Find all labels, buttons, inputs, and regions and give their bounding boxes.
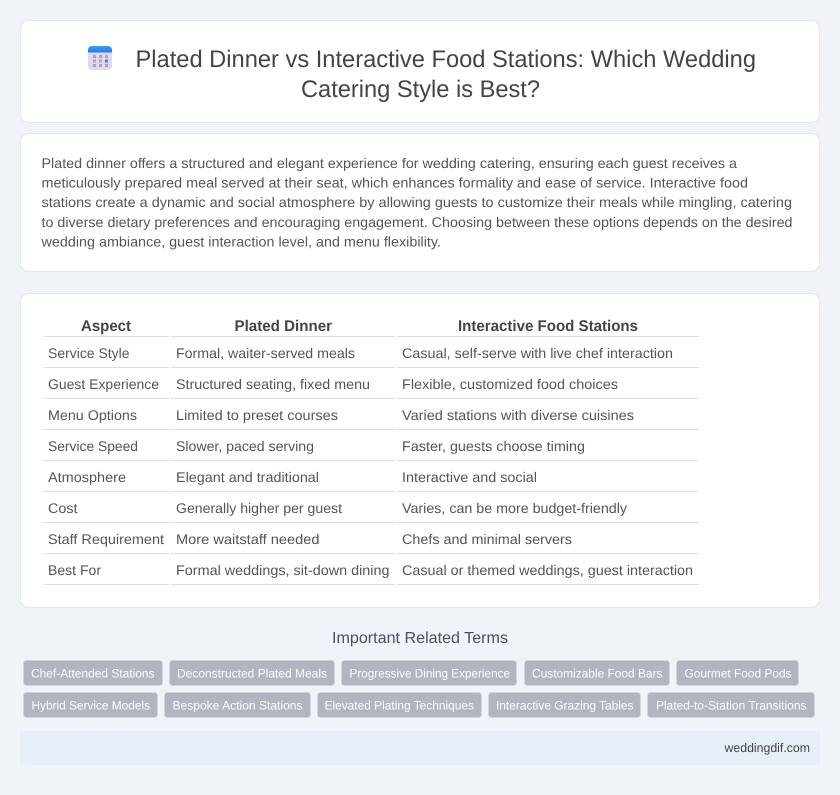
row: service speed: Service Speed [48, 438, 138, 454]
tags: related terms: Hybrid Service Models [32, 698, 150, 712]
row: guest experience: Guest Experience [48, 376, 159, 392]
tags: related terms [24, 660, 814, 718]
row: cost: Varies, can be more budget-friendly [402, 500, 627, 516]
table header row: Plated Dinner [234, 318, 332, 335]
tags: related terms: Customizable Food Bars [532, 666, 662, 680]
row: service style: Service Style [48, 345, 130, 361]
row: cost: Cost [48, 500, 78, 516]
row: staff requirement: Staff Requirement [48, 531, 164, 547]
row: service speed: Slower, paced serving [176, 438, 314, 454]
text block: intro paragraph: to diverse dietary preferences and encouraging engagement. Choosing between these options depends on the desired [42, 214, 792, 230]
row: guest experience [48, 376, 618, 392]
row: staff requirement [48, 531, 572, 547]
table header row: Aspect [81, 318, 131, 335]
tags: related terms: Chef-Attended Stations [31, 666, 154, 680]
row: staff requirement: Chefs and minimal servers [402, 531, 572, 547]
text block: intro paragraph: meticulously prepared meal served at their seat, which enhances formality and ease of service. Interactive food [42, 175, 748, 191]
row: menu options: Limited to preset courses [176, 407, 338, 423]
row: guest experience: Flexible, customized food choices [402, 376, 618, 392]
row: best for [48, 562, 693, 578]
footer: weddingdif.com [724, 741, 810, 755]
row: menu options: Menu Options [48, 407, 137, 423]
row: atmosphere: Atmosphere [48, 469, 126, 485]
panel: header [20, 20, 820, 122]
row: service speed [48, 438, 585, 454]
panel: intro text [20, 134, 820, 272]
footer [20, 731, 820, 765]
tags: related terms: Gourmet Food Pods [684, 666, 792, 680]
table header row [81, 318, 638, 335]
table header row: Interactive Food Stations [458, 318, 638, 335]
row: staff requirement: More waitstaff needed [176, 531, 320, 547]
row: service style: Casual, self-serve with live chef interaction [402, 345, 673, 361]
title: Plated Dinner vs Interactive Food Stations: Which Wedding [136, 46, 756, 73]
tags: related terms: Deconstructed Plated Meals [177, 666, 327, 680]
row: cost: Generally higher per guest [176, 500, 342, 516]
heading: important related terms: Important Related Terms [332, 630, 508, 647]
row: menu options [48, 407, 634, 423]
icon: calendar [88, 46, 112, 70]
row: best for: Formal weddings, sit-down dining [176, 562, 390, 578]
tags: related terms: Bespoke Action Stations [172, 698, 302, 712]
title [136, 46, 756, 103]
text block: intro paragraph: Plated dinner offers a structured and elegant experience for wedding catering, ensuring each guest receives a [42, 155, 737, 171]
row: atmosphere: Interactive and social [402, 469, 537, 485]
row: atmosphere: Elegant and traditional [176, 469, 319, 485]
tags: related terms: Plated-to-Station Transitions [656, 698, 806, 712]
tags: related terms: Interactive Grazing Tables [496, 698, 634, 712]
text block: intro paragraph: stations create a dynamic and social atmosphere by allowing guests to customize their meals while mingling, catering [42, 194, 792, 210]
row: best for: Casual or themed weddings, guest interaction [402, 562, 693, 578]
row: guest experience: Structured seating, fixed menu [176, 376, 370, 392]
row: service style [48, 345, 673, 361]
text block: intro paragraph [40, 155, 792, 249]
row: menu options: Varied stations with diverse cuisines [402, 407, 634, 423]
title: Catering Style is Best? [301, 76, 540, 103]
tags: related terms: Progressive Dining Experience [350, 666, 510, 680]
text block: intro paragraph: wedding ambiance, guest interaction level, and menu flexibility. [40, 233, 441, 249]
row: best for: Best For [48, 562, 101, 578]
tags: related terms: Elevated Plating Techniques [324, 698, 474, 712]
row: service style: Formal, waiter-served meals [176, 345, 355, 361]
row: atmosphere [48, 469, 537, 485]
panel: comparison table [20, 294, 820, 608]
row: service speed: Faster, guests choose timing [402, 438, 585, 454]
row: cost [48, 500, 627, 516]
